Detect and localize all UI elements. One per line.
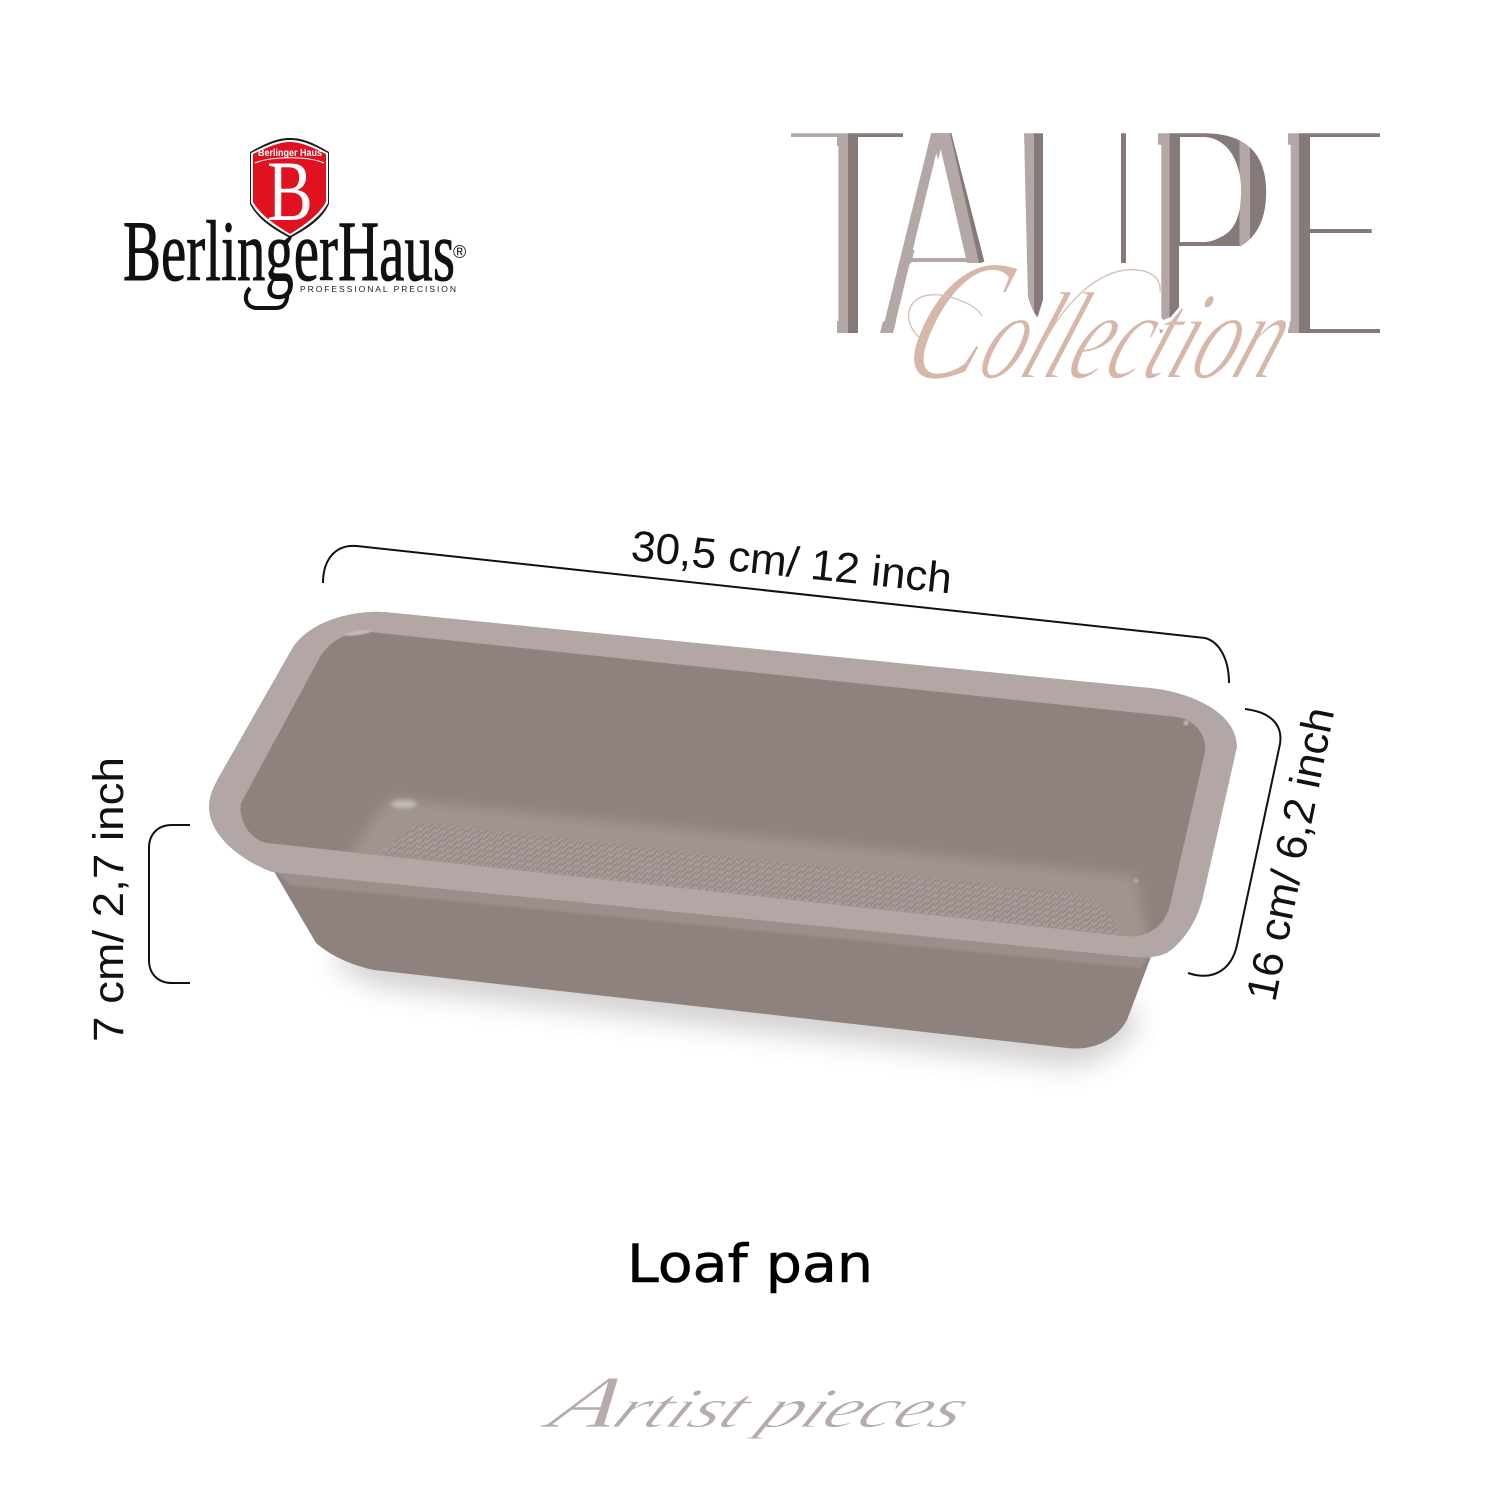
pan rim <box>209 612 1237 958</box>
brand name: BerlingerHaus <box>123 203 455 299</box>
heading: TAUPE: T <box>776 62 923 400</box>
product name: Loaf pan <box>627 1234 873 1295</box>
heading: TAUPE: E <box>1262 61 1418 399</box>
logo: Berlinger Haus <box>123 138 466 308</box>
dimension: width bracket and label: 16 cm/ 6,2 inch <box>1238 703 1344 1005</box>
floor texture <box>378 823 1124 940</box>
interior floor <box>345 798 1150 945</box>
heading: TAUPE <box>791 133 1380 333</box>
highlights <box>391 800 417 808</box>
pan shadow <box>330 930 1140 1066</box>
icon: red shield: Berlinger Haus <box>258 148 322 159</box>
tagline: PROFESSIONAL PRECISION <box>300 284 456 294</box>
heading: TAUPE: P <box>1132 62 1277 400</box>
g swash <box>246 288 287 308</box>
registered mark: ® <box>453 242 466 262</box>
pan interior <box>241 632 1205 936</box>
product: loaf pan <box>209 612 1237 1066</box>
icon: red shield: B <box>267 144 313 239</box>
dimension: length bracket and label: 30,5 cm/ 12 inch <box>629 522 954 603</box>
pan body <box>272 868 1152 1049</box>
icon: red shield <box>250 138 329 239</box>
rim underside band <box>272 868 1152 968</box>
heading: Collection script: Collection <box>880 225 1332 416</box>
script flourishes <box>909 270 1160 350</box>
title: Taupe Collection <box>791 133 1380 379</box>
tagline: Artist pieces: Artist pieces <box>529 1362 992 1444</box>
dimension: height bracket and label <box>85 757 190 1042</box>
heading: TAUPE: U <box>1003 62 1151 400</box>
dimension: length bracket and label <box>323 522 1229 683</box>
heading: Collection script: Collection <box>880 225 1332 416</box>
heading: TAUPE: A <box>867 62 1019 399</box>
dimension: height bracket and label: 7 cm/ 2,7 inch <box>85 757 133 1042</box>
dimension: width bracket and label <box>1188 703 1344 1005</box>
